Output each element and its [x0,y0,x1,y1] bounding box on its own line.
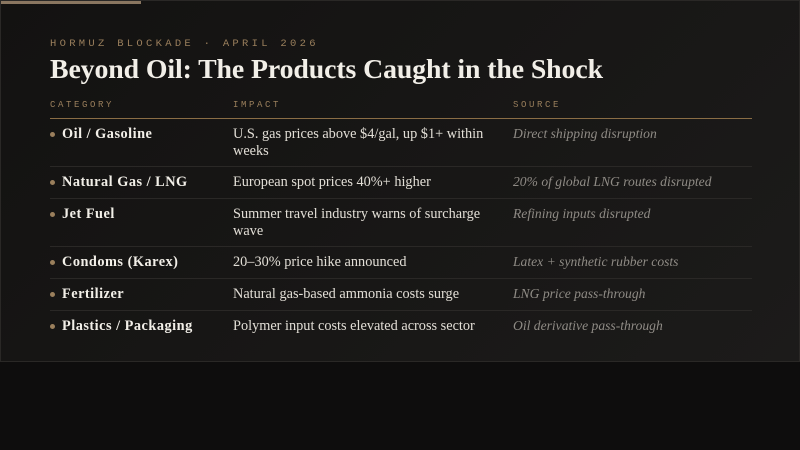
header: source: SOURCE [513,100,561,110]
table [50,118,752,343]
row: oil: U.S. gas prices above $4/gal, up $1+ within weeks [233,126,483,158]
row: plastics [50,318,663,334]
header: impact: IMPACT [233,100,281,110]
row: natural gas: Natural Gas / LNG [62,174,188,190]
row: jet fuel: Summer travel industry warns of surcharge wave [233,206,480,238]
row: plastics: Polymer input costs elevated across sector [233,318,475,334]
row: natural gas: European spot prices 40%+ higher [233,174,431,190]
row: fertilizer: LNG price pass-through [513,286,645,301]
row: fertilizer: Fertilizer [62,286,124,302]
accent bar [1,1,141,4]
row: condoms [50,247,752,279]
row: jet fuel: Jet Fuel [62,206,115,222]
row: jet fuel [50,199,752,247]
row: condoms: Condoms (Karex) [62,254,178,270]
row: natural gas [50,167,752,199]
title: Beyond Oil: The Products Caught in the Shock [50,54,603,85]
row: oil [50,119,752,167]
row: fertilizer: Natural gas-based ammonia costs surge [233,286,459,302]
row: jet fuel: Refining inputs disrupted [513,206,650,221]
row: oil: Direct shipping disruption [513,126,657,141]
row: condoms: Latex + synthetic rubber costs [513,254,678,269]
row: natural gas: 20% of global LNG routes disrupted [513,174,712,189]
row: plastics: Plastics / Packaging [62,318,193,334]
row: fertilizer [50,279,752,311]
row: condoms: 20–30% price hike announced [233,254,406,270]
row: plastics: Oil derivative pass-through [513,318,663,333]
row: oil: Oil / Gasoline [62,126,152,142]
header: category: CATEGORY [50,100,114,110]
eyebrow: HORMUZ BLOCKADE · APRIL 2026 [50,38,319,50]
